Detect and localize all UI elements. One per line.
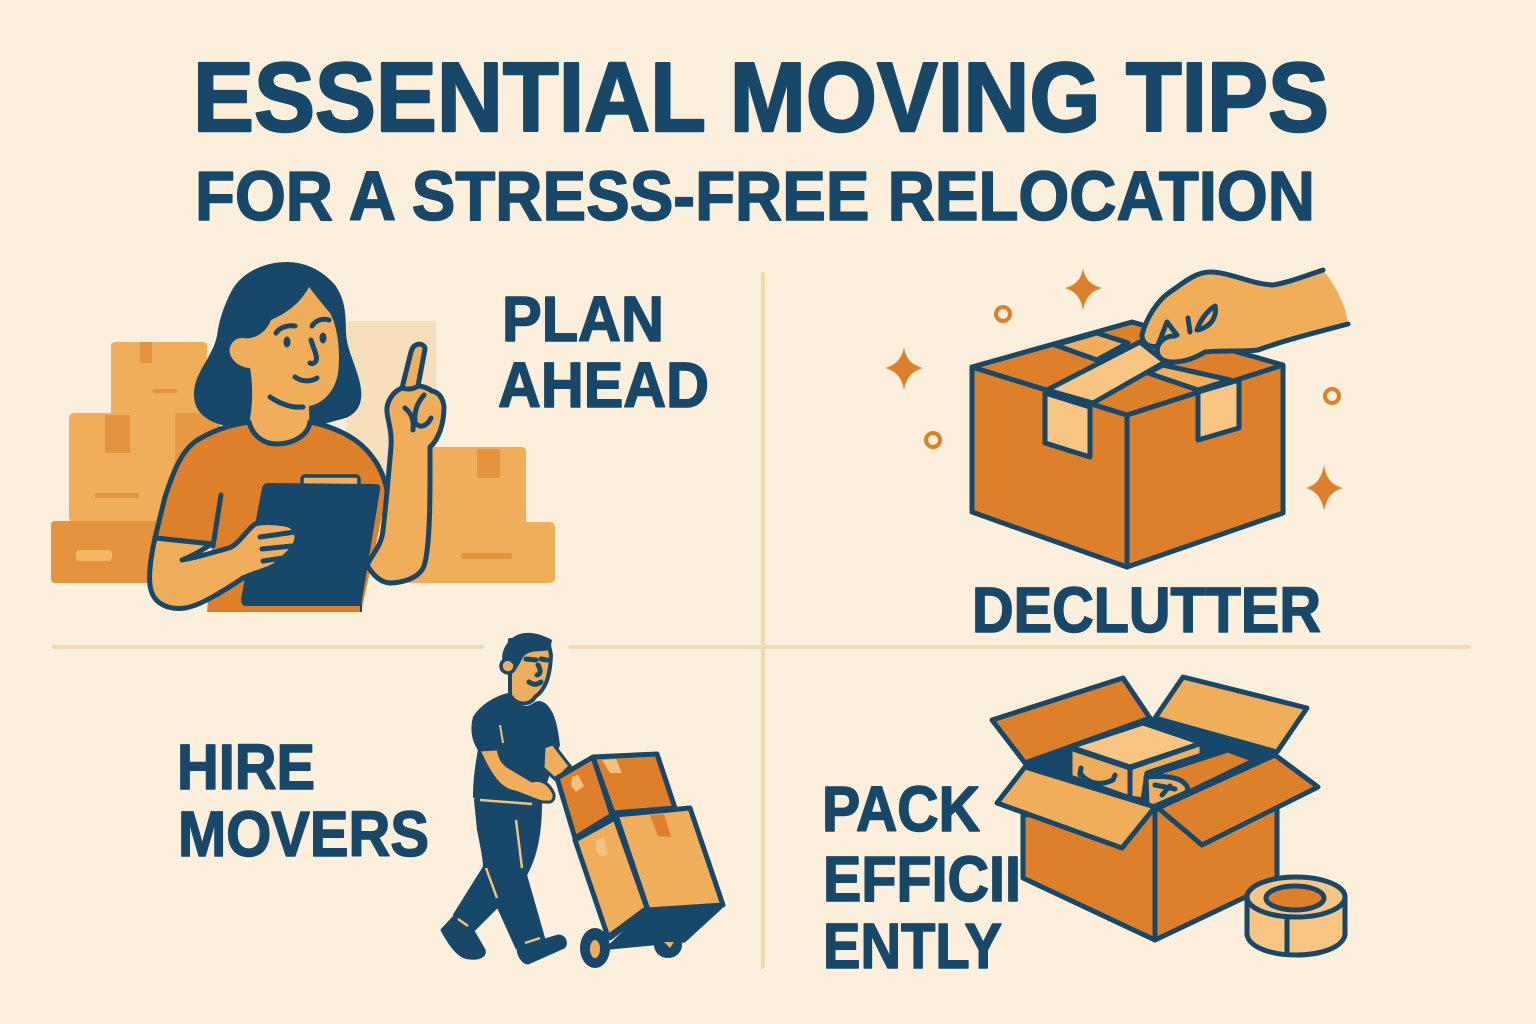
panel: declutter: [885, 268, 1348, 567]
label: pack efficiently: EFFICII: [823, 843, 1021, 915]
label: hire movers: [177, 731, 429, 870]
label: plan ahead: PLAN: [502, 283, 664, 355]
woman: [150, 262, 444, 612]
background boxes: [51, 321, 555, 583]
tape roll: [1247, 877, 1345, 955]
panel: pack efficiently: [992, 677, 1345, 955]
label: plan ahead: AHEAD: [498, 349, 709, 421]
title: ESSENTIAL MOVING TIPS: [193, 42, 1329, 152]
subtitle: FOR A STRESS-FREE RELOCATION: [195, 157, 1315, 235]
hand: [1142, 270, 1348, 362]
label: pack efficiently: ENTLY: [823, 910, 1002, 982]
label: pack efficiently: PACK: [822, 773, 980, 845]
mover: [442, 633, 570, 963]
label: hire movers: MOVERS: [178, 798, 429, 870]
hand truck with boxes: [557, 754, 723, 968]
panel: hire movers: [442, 633, 723, 968]
open box: [992, 677, 1318, 940]
panel: plan ahead: [51, 262, 555, 612]
sealed box: [972, 322, 1283, 567]
label: declutter: DECLUTTER: [972, 574, 1321, 646]
label: plan ahead: [498, 283, 709, 421]
label: hire movers: HIRE: [177, 731, 315, 803]
label: pack efficiently: [822, 773, 1021, 982]
sparkles: [885, 268, 1343, 511]
